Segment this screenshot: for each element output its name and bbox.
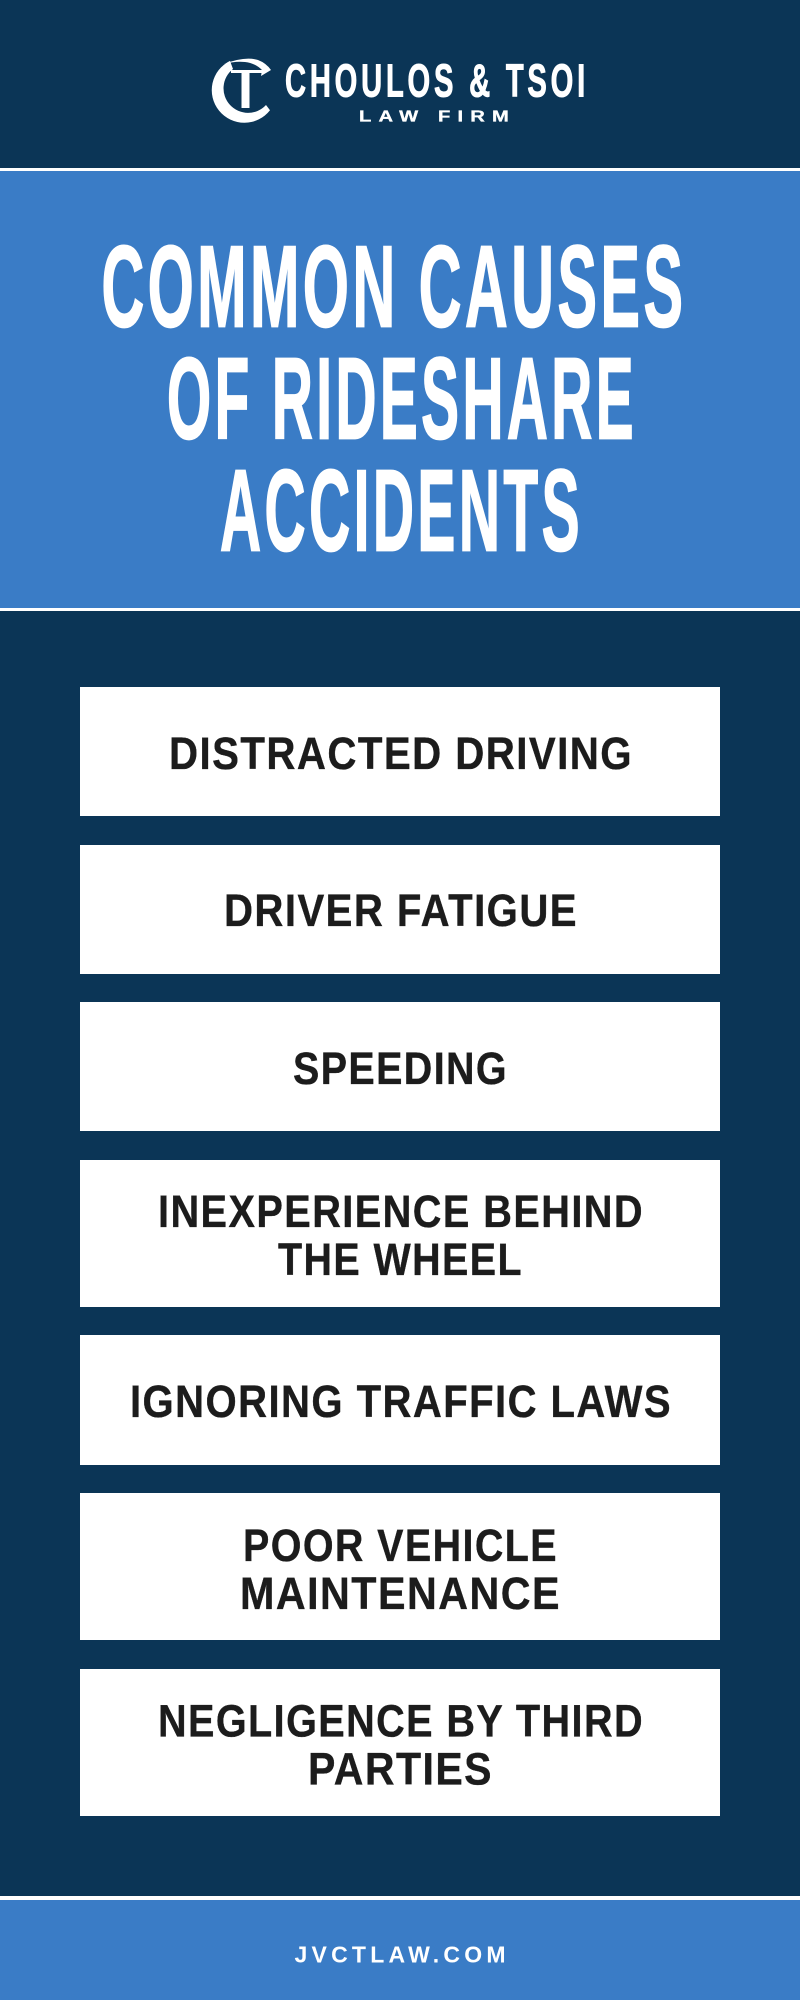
cause card: distracted driving (80, 687, 720, 816)
cause card: ignoring traffic laws: IGNORING TRAFFIC LAWS (130, 1376, 672, 1427)
cause card: distracted driving: DISTRACTED DRIVING (169, 728, 633, 779)
title band (0, 168, 800, 611)
cause card: negligence by third parties (80, 1669, 720, 1816)
header logo (212, 55, 589, 126)
cause card: poor vehicle maintenance: MAINTENANCE (240, 1568, 561, 1619)
firm name: CHOULOS & TSOI (285, 55, 589, 107)
cause card: poor vehicle maintenance: POOR VEHICLE (243, 1520, 558, 1571)
cause card: driver fatigue (80, 845, 720, 974)
cause card: ignoring traffic laws (80, 1335, 720, 1465)
footer band (0, 1896, 800, 2000)
cause card: inexperience behind the wheel: INEXPERIENCE BEHIND (158, 1186, 644, 1237)
icon: CT monogram (212, 59, 271, 123)
cause card: poor vehicle maintenance (80, 1493, 720, 1640)
cause card: driver fatigue: DRIVER FATIGUE (224, 885, 578, 936)
cause card: speeding (80, 1002, 720, 1131)
cause card: inexperience behind the wheel (80, 1160, 720, 1307)
title (102, 222, 686, 576)
cause card: speeding: SPEEDING (293, 1043, 508, 1094)
cause card: negligence by third parties: PARTIES (308, 1744, 493, 1795)
firm subtitle: LAW FIRM (359, 109, 516, 126)
cause card: negligence by third parties: NEGLIGENCE BY THIRD (158, 1696, 644, 1747)
website: JVCTLAW.COM (294, 1941, 506, 1967)
cause card: inexperience behind the wheel: THE WHEEL (278, 1234, 523, 1285)
